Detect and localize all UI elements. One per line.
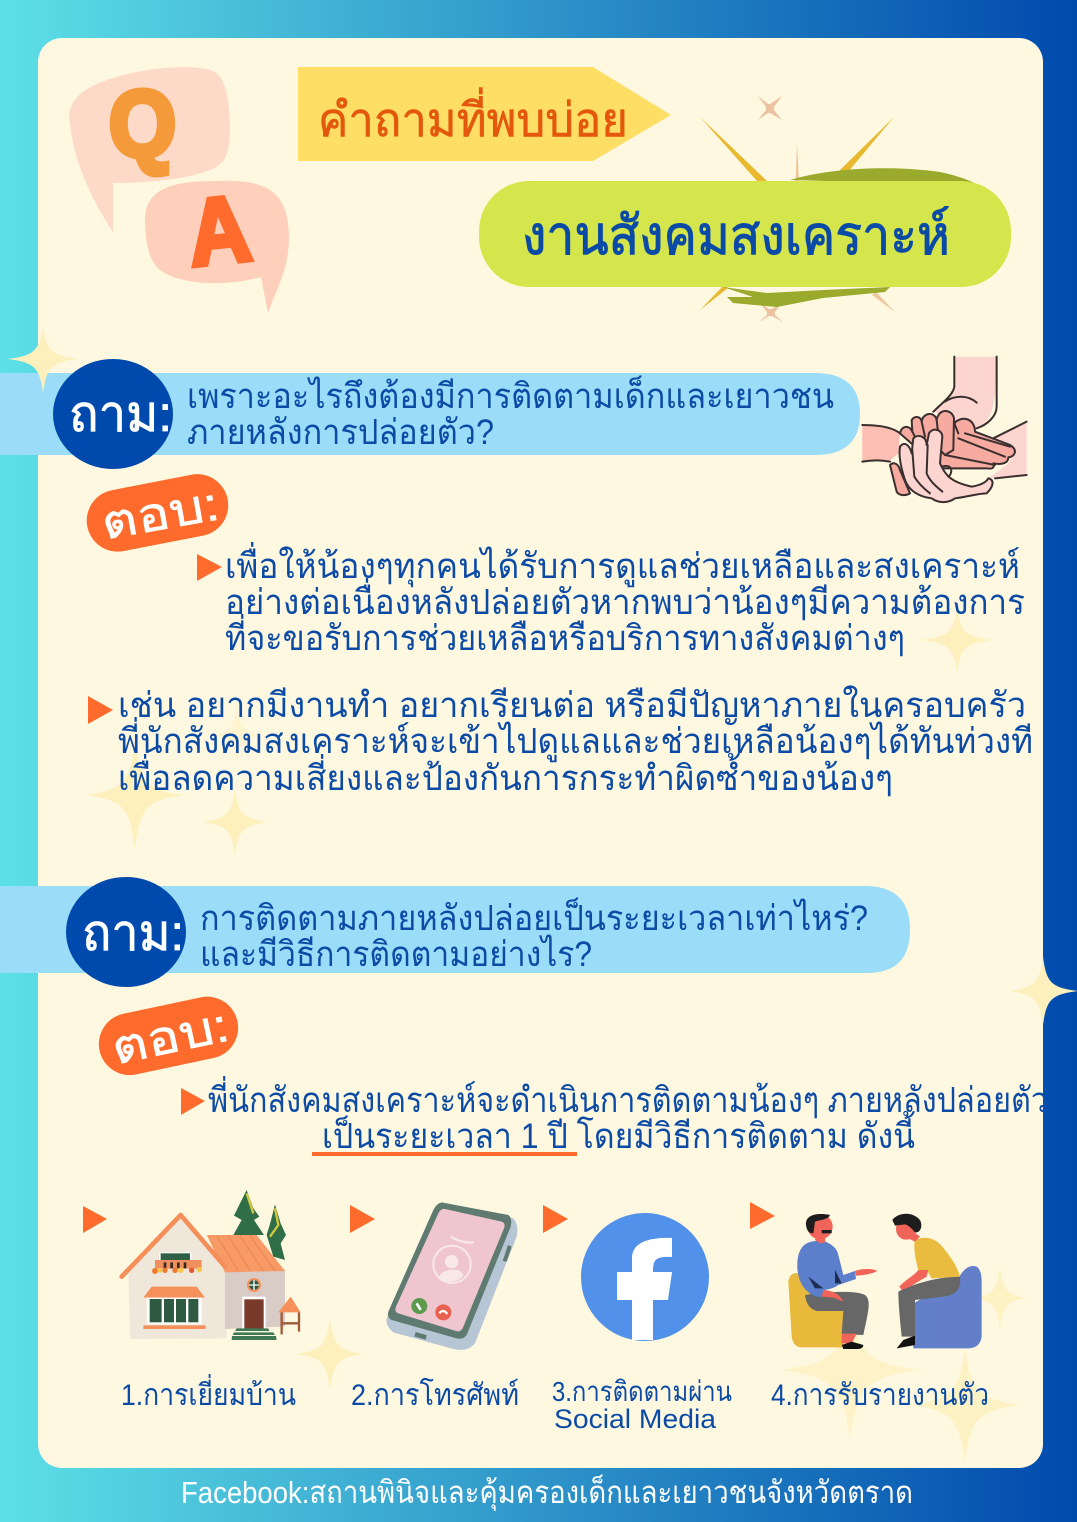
answer badge 1 — [81, 469, 234, 557]
answer badge 2: ตอบ: — [107, 998, 233, 1074]
question badge 2 — [66, 877, 186, 987]
answer text 2: เพื่อลดความเสี่ยงและป้องกันการกระทำผิดซ้ำของน้องๆ — [118, 752, 893, 798]
question badge 1: ถาม: — [69, 386, 172, 442]
answer text 1: ที่จะขอรับการช่วยเหลือหรือบริการทางสังคมต่างๆ — [225, 614, 905, 658]
icon: facebook logo — [581, 1213, 709, 1341]
decorative sparkles — [88, 608, 1077, 1462]
icon: house — [122, 1190, 301, 1340]
answer badge 2 — [93, 991, 244, 1081]
icon: Q speech bubble: Q — [109, 71, 176, 176]
question bar 2: การติดตามภายหลังปล่อยเป็นระยะเวลาเท่าไหร่? — [200, 897, 868, 938]
method label 3 — [552, 1376, 732, 1434]
answer text 1 — [197, 542, 1025, 658]
question bar 1 — [0, 325, 860, 469]
footer facebook text: Facebook:สถานพินิจและคุ้มครองเด็กและเยาวชนจังหวัดตราด — [181, 1474, 913, 1512]
heading arrow banner — [298, 67, 671, 161]
question bar 2 — [0, 877, 910, 987]
answer text 2: เช่น อยากมีงานทำ อยากเรียนต่อ หรือมีปัญหาภายในครอบครัว — [118, 685, 1026, 725]
answer badge 1: ตอบ: — [97, 477, 223, 549]
question badge 2: ถาม: — [82, 905, 184, 961]
method label 3: 3.การติดตามผ่าน — [552, 1376, 732, 1407]
icon: A speech bubble — [145, 175, 289, 313]
icon: A speech bubble: A — [183, 175, 256, 286]
answer text 1: เพื่อให้น้องๆทุกคนได้รับการดูแลช่วยเหลือและสงเคราะห์ — [225, 542, 1020, 587]
title pill — [479, 181, 1011, 287]
question bar 1: ภายหลังการปล่อยตัว? — [187, 413, 494, 452]
answer text 1: อย่างต่อเนื่องหลังปล่อยตัวหากพบว่าน้องๆมีความต้องการ — [225, 578, 1025, 622]
heading arrow banner: คำถามที่พบบ่อย — [318, 87, 628, 146]
answer text 3: เป็นระยะเวลา 1 ปี โดยมีวิธีการติดตาม ดังนี้ — [322, 1110, 916, 1156]
icon: phone — [386, 1202, 517, 1350]
sparkle on bar — [8, 325, 79, 393]
question badge 1 — [53, 359, 173, 469]
answer text 3 — [181, 1076, 1048, 1156]
question bar 2: และมีวิธีการติดตามอย่างไร? — [200, 934, 592, 974]
icon: holding hands — [862, 357, 1027, 502]
method label 2: 2.การโทรศัพท์ — [351, 1377, 519, 1412]
icon: two people talking — [788, 1214, 982, 1349]
answer text 2 — [88, 685, 1033, 798]
title pill: งานสังคมสงเคราะห์ — [522, 206, 950, 266]
decorative rays and brush strokes — [700, 96, 998, 322]
icon: Q speech bubble — [69, 67, 230, 232]
method label 1: 1.การเยี่ยมบ้าน — [121, 1374, 296, 1412]
arrow markers — [83, 1202, 775, 1233]
method label 4: 4.การรับรายงานตัว — [771, 1379, 989, 1412]
question bar 1: เพราะอะไรถึงต้องมีการติดตามเด็กและเยาวชน — [187, 375, 834, 416]
answer text 2: พี่นักสังคมสงเคราะห์จะเข้าไปดูแลและช่วยเหลือน้องๆได้ทันท่วงที — [118, 717, 1033, 762]
method label 3: Social Media — [554, 1404, 717, 1434]
